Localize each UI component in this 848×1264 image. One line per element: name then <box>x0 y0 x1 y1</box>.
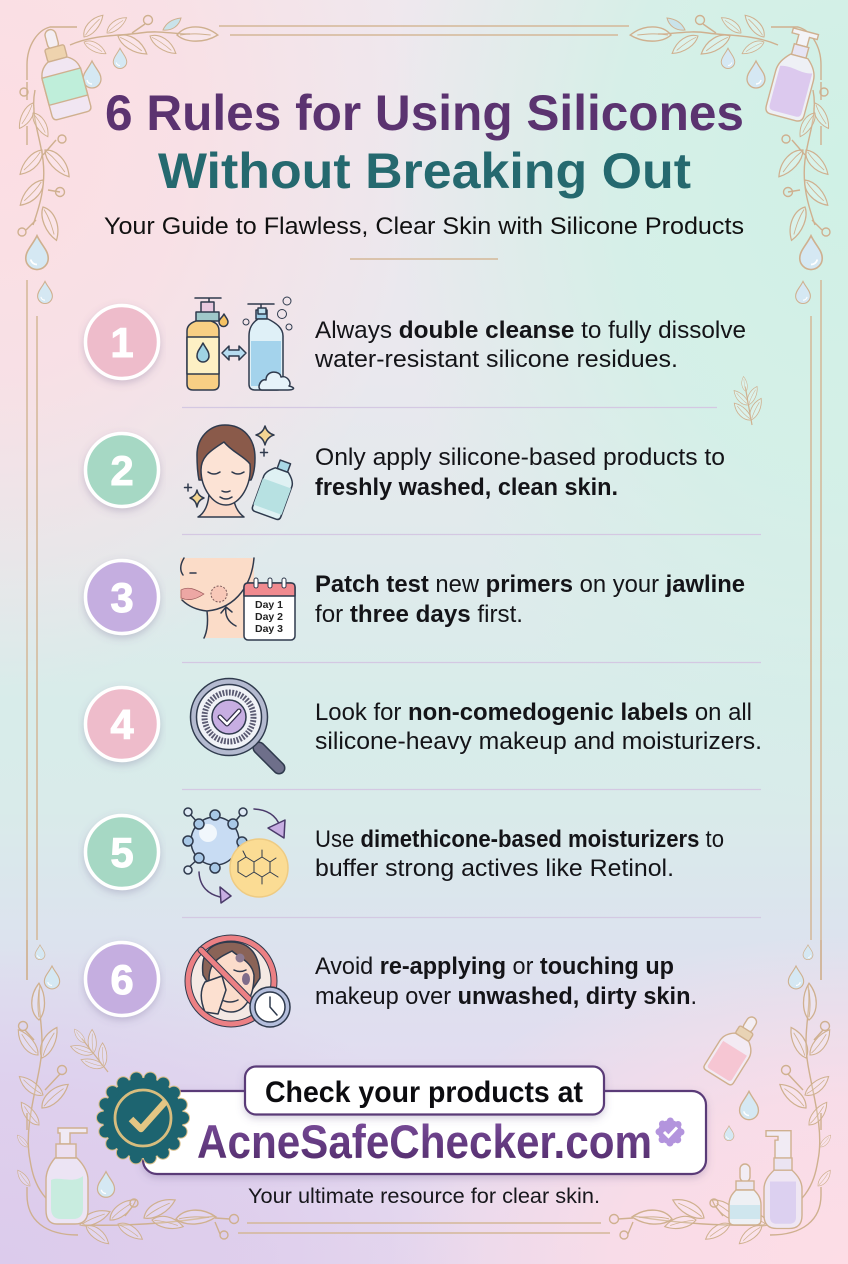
rule dividers <box>182 408 761 918</box>
icon: molecules <box>183 808 288 903</box>
text rule 5: buffer strong actives like Retinol. <box>315 855 674 882</box>
icon: large pump bottle bottom right <box>764 1131 802 1228</box>
title: 6 Rules for Using Silicones <box>105 85 744 141</box>
icon: jawline and calendar: Day 1 <box>255 599 283 611</box>
icon: droplet bottom left <box>97 1172 115 1197</box>
text rule 2: freshly washed, clean skin. <box>315 474 618 501</box>
number badge 1: 1 <box>110 319 134 366</box>
text rule 1: Always double cleanse to fully dissolve <box>315 317 746 344</box>
text rule 2: Only apply silicone-based products to <box>315 444 725 471</box>
CTA header pill <box>245 1066 604 1114</box>
number badge 2 <box>86 434 158 506</box>
icon: small dropper bottle bottom right <box>729 1164 761 1225</box>
text rule 3: for three days first. <box>315 601 523 628</box>
CTA header pill: Check your products at <box>265 1076 583 1109</box>
icon: magnifier over label <box>190 678 279 768</box>
icon: dropper bottle top left <box>30 24 92 121</box>
CTA main panel <box>143 1091 706 1174</box>
number badge 4: 4 <box>110 701 134 748</box>
icon: droplets bottom right <box>724 1091 758 1141</box>
text rule 4: Look for non-comedogenic labels on all <box>315 699 752 726</box>
rule 2 <box>86 425 725 520</box>
icon: jawline and calendar: Day 2 <box>255 611 283 623</box>
number badge 6: 6 <box>110 956 134 1003</box>
icon: sprig bottom left <box>61 1019 121 1083</box>
call to action <box>103 1066 706 1174</box>
corner botanical: bottom right <box>610 940 835 1247</box>
icon: no touching up <box>188 938 290 1027</box>
number badge 3 <box>86 560 158 634</box>
subtitle: Your Guide to Flawless, Clear Skin with Silicone Products <box>104 213 744 240</box>
corner botanical: bottom left <box>13 940 238 1247</box>
icon: teal seal with check <box>103 1078 183 1158</box>
number badge 5 <box>86 816 158 888</box>
icon: verified badge <box>658 1120 682 1144</box>
icon: oil and foam cleansers <box>187 297 294 390</box>
icon: pump bottle bottom left <box>46 1128 88 1224</box>
number badge 4 <box>86 688 158 760</box>
text rule 2 <box>315 444 725 501</box>
text rule 1: water-resistant silicone residues. <box>314 346 678 373</box>
number badge 2: 2 <box>110 447 134 494</box>
rule 1 <box>86 297 746 390</box>
title: Without Breaking Out <box>158 143 691 199</box>
number badge 1 <box>86 306 158 378</box>
text rule 4 <box>315 699 762 755</box>
text rule 6 <box>315 953 697 1010</box>
rule 6 <box>86 938 697 1027</box>
icon: jawline and calendar: Day 3 <box>255 623 283 635</box>
icon: jawline and calendar <box>180 558 295 640</box>
number badge 5: 5 <box>110 829 134 876</box>
text rule 5 <box>315 826 724 882</box>
CTA website: AcneSafeChecker.com <box>197 1115 652 1168</box>
rule 3 <box>86 558 745 640</box>
rule 4 <box>86 678 762 768</box>
rule 5 <box>86 808 724 903</box>
number badge 6 <box>86 942 158 1016</box>
title <box>105 85 744 199</box>
icon: pump bottle top right <box>765 26 825 122</box>
text rule 6: makeup over unwashed, dirty skin. <box>315 983 697 1010</box>
corner botanical: top right <box>630 12 832 303</box>
number badge 3: 3 <box>110 574 134 621</box>
text rule 5: Use dimethicone-based moisturizers to <box>315 826 724 853</box>
text rule 3: Patch test new primers on your jawline <box>315 571 745 598</box>
icon: pink dropper bottle bottom right <box>703 1009 769 1086</box>
text rule 1 <box>314 317 746 373</box>
icon: sprig right of rule one <box>726 374 768 428</box>
tagline: Your ultimate resource for clear skin. <box>248 1185 600 1208</box>
text rule 3 <box>315 571 745 628</box>
corner botanical: top left <box>16 12 218 303</box>
icon: clean face and bottle <box>184 425 299 520</box>
text rule 4: silicone-heavy makeup and moisturizers. <box>315 728 762 755</box>
title divider <box>350 258 498 260</box>
text rule 6: Avoid re-applying or touching up <box>315 953 674 980</box>
